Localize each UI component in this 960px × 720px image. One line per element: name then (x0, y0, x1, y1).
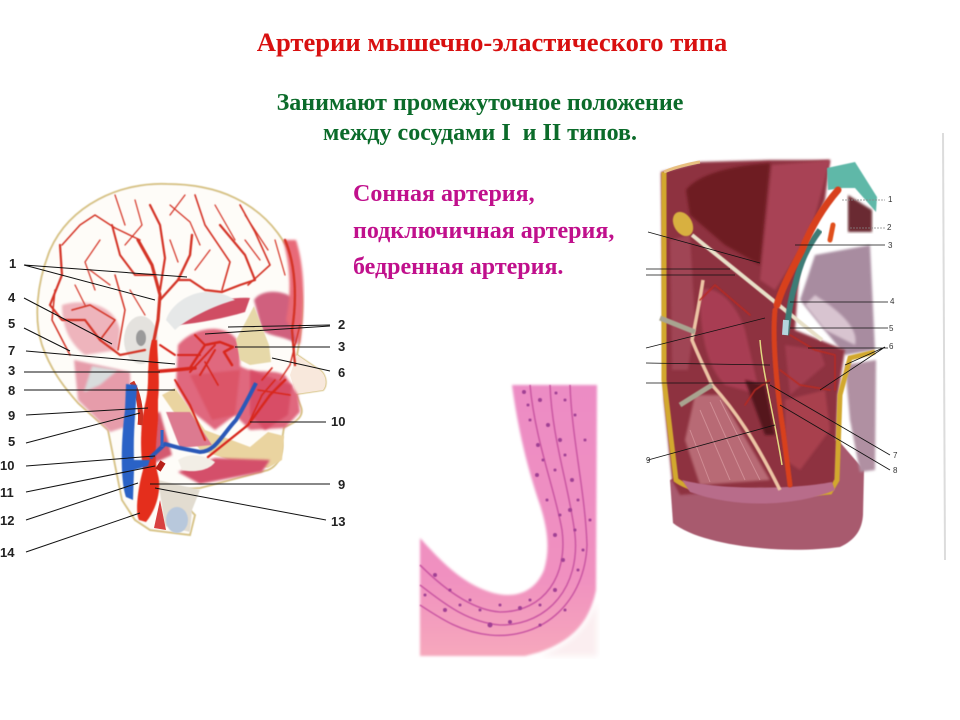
list of arteries: бедренная артерия. (353, 254, 563, 280)
head silhouette (37, 184, 326, 535)
illustration: femoral region dissection (646, 160, 898, 550)
iliac vein (786, 230, 820, 335)
thigh labels: 7 (893, 451, 898, 460)
list of arteries: Сонная артерия, (353, 181, 535, 207)
throat (158, 480, 200, 532)
head labels right: 2 (338, 317, 345, 332)
pubic vessels (848, 195, 872, 232)
head labels left: 9 (8, 408, 15, 423)
head labels left: 4 (8, 290, 16, 305)
head labels left: 5 (8, 316, 15, 331)
nerve pale (692, 280, 780, 490)
facial muscles (176, 329, 300, 430)
psoas muscle (760, 160, 830, 290)
list of arteries (353, 181, 614, 280)
nose skin (290, 355, 326, 394)
illustration: head arteries (0, 184, 345, 560)
lateral muscle strip (670, 235, 695, 370)
thigh labels: 2 (887, 223, 892, 232)
thigh labels: 8 (893, 466, 898, 475)
skin base (670, 440, 864, 550)
temporal muscle left region (62, 302, 120, 355)
head labels right: 13 (331, 514, 345, 529)
eye socket bone (124, 316, 158, 364)
retractors (660, 318, 712, 405)
thigh labels (646, 195, 898, 475)
hip joint yellow (669, 208, 697, 240)
lower medial muscle (785, 390, 830, 470)
upper orbital muscle (177, 298, 250, 325)
dissection field muscle base (661, 160, 845, 495)
head labels right: 3 (338, 339, 345, 354)
femoral artery (700, 190, 838, 485)
scan edge line (943, 133, 945, 560)
head labels left: 14 (0, 545, 15, 560)
wall fibres (420, 385, 587, 635)
dark gap (745, 380, 775, 435)
subtitle text (277, 90, 684, 146)
facial artery branches (150, 335, 290, 457)
head labels right: 10 (331, 414, 345, 429)
dark iliac muscle (686, 163, 770, 265)
head labels right: 6 (338, 365, 345, 380)
cranial artery branches (50, 195, 300, 400)
list of arteries: подключичная артерия, (353, 218, 614, 244)
thigh labels: 3 (888, 241, 893, 250)
thigh labels: 4 (890, 297, 895, 306)
jugular vein (122, 384, 150, 500)
lower thigh muscle (685, 395, 770, 485)
head labels right: 9 (338, 477, 345, 492)
adductor muscle (785, 345, 825, 395)
chin muscles (178, 458, 270, 484)
head labels left: 1 (9, 256, 16, 271)
head labels right (331, 317, 345, 529)
head labels left (0, 256, 16, 560)
leader lines (646, 200, 890, 470)
head labels left: 5 (8, 434, 15, 449)
head labels left: 7 (8, 343, 15, 358)
head labels left: 3 (8, 363, 15, 378)
yellow fat border (664, 172, 875, 496)
muscle striations (690, 400, 760, 482)
illustration: artery wall histology (420, 385, 597, 656)
cell nuclei (424, 390, 592, 628)
carotid artery (137, 340, 159, 522)
head labels left: 11 (0, 485, 14, 500)
leader lines (24, 265, 330, 552)
title: Артерии мышечно-эластического типа (257, 27, 727, 57)
pale sheath (805, 295, 856, 345)
thigh labels: 6 (889, 342, 894, 351)
pale fascial layer (682, 480, 835, 504)
thigh labels: 9 (646, 456, 651, 465)
thigh labels: 1 (888, 195, 893, 204)
head labels left: 12 (0, 513, 14, 528)
neck muscles (74, 360, 132, 432)
teal ligament (827, 162, 877, 212)
inguinal ligament (692, 235, 822, 340)
subtitle text: между сосудами I и II типов. (323, 120, 637, 146)
subtitle text: Занимают промежуточное положение (277, 90, 684, 116)
rectus muscle (700, 289, 760, 395)
head labels left: 8 (8, 383, 15, 398)
head labels left: 10 (0, 458, 14, 473)
thigh labels: 5 (889, 324, 894, 333)
facial vein (150, 383, 256, 458)
forehead and temple muscle (254, 292, 298, 345)
pale mauve abdominal area (800, 245, 875, 355)
bottom right pale patch (540, 600, 597, 656)
jaw bone (162, 388, 284, 468)
skull orbit bone (236, 306, 271, 365)
